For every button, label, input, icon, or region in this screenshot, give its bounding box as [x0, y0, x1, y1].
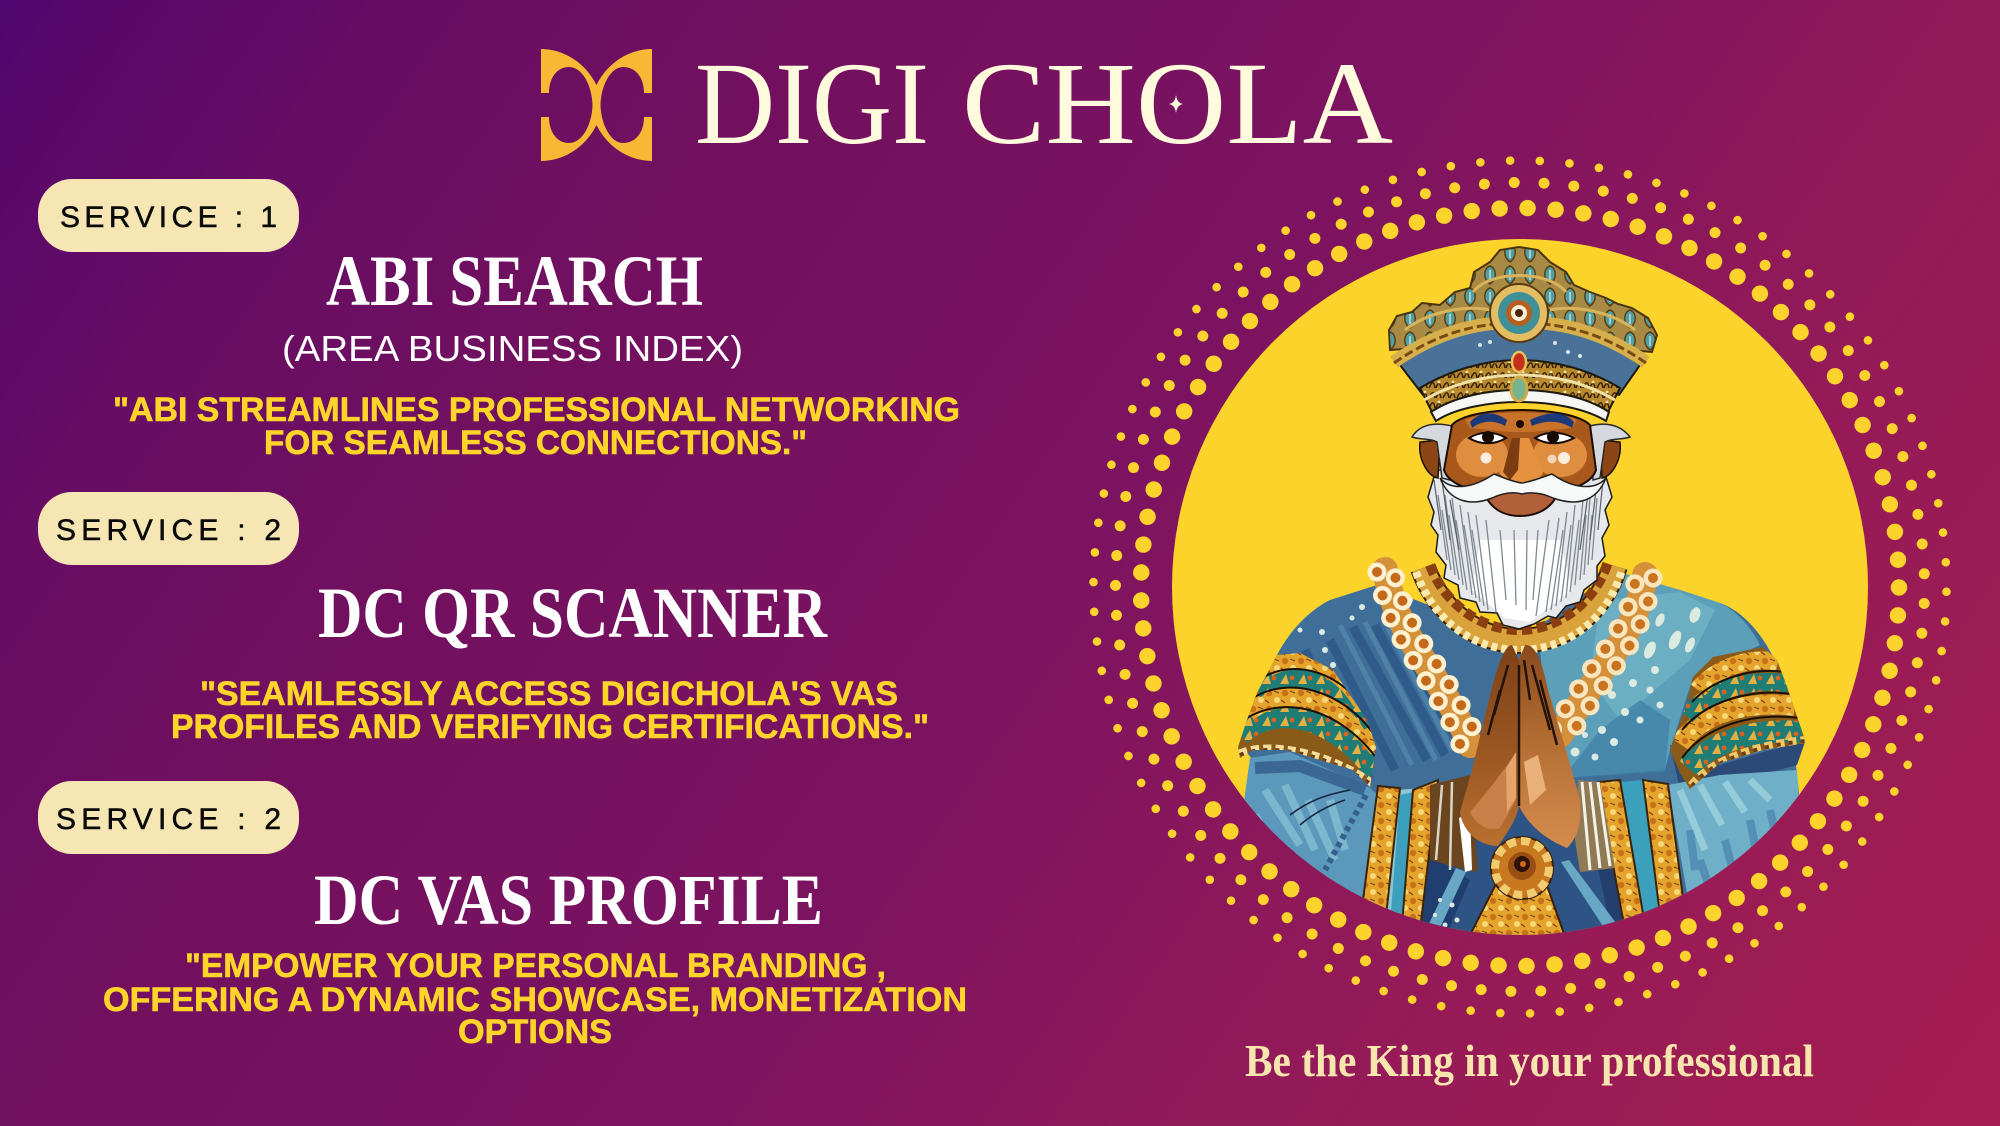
heading: DC VAS Profile: DC VAS PROFILE: [314, 860, 823, 940]
badge: service 1: [38, 179, 299, 252]
crown fan silhouette: [1389, 247, 1657, 352]
quote: VAS profile: "EMPOWER YOUR PERSONAL BRANDING ,: [185, 947, 886, 985]
garland right: [1552, 572, 1653, 740]
robe dark underarm and lower centre: [1670, 743, 1805, 783]
logo: Digi Chola: [541, 38, 1393, 169]
collar necklace: [1416, 562, 1622, 650]
badge: service 3: SERVICE : 2: [56, 803, 281, 836]
left armband: [1238, 653, 1376, 787]
brand wordmark: DIGI: [695, 38, 929, 169]
right hand: [1488, 645, 1580, 848]
brand wordmark: [695, 38, 1393, 169]
quote: ABI: FOR SEAMLESS CONNECTIONS.": [264, 424, 807, 462]
right cuff bands: [1598, 780, 1684, 925]
quote: ABI: "ABI STREAMLINES PROFESSIONAL NETWORKING: [113, 391, 960, 429]
left hand: [1460, 645, 1519, 846]
quote: scanner: PROFILES AND VERIFYING CERTIFICATIONS.": [171, 708, 929, 746]
illustration: king in namaste pose: [1230, 247, 1810, 960]
quote: ABI: [113, 391, 960, 462]
left forearm sleeve: [1244, 752, 1376, 898]
crown jewels: [1511, 352, 1527, 401]
robe dots: [1298, 597, 1702, 928]
icon: gold interlocking C mark: [541, 49, 652, 161]
right forearm sleeve: [1669, 770, 1799, 892]
crown white strip: [1431, 390, 1609, 421]
badge: service 3: [38, 781, 299, 854]
right armband: [1670, 647, 1806, 789]
dotted ring around portrait: [1089, 156, 1951, 1018]
quote: VAS profile: [103, 947, 967, 1051]
crown ornate band: [1420, 360, 1620, 412]
crown fan highlights: [1405, 276, 1635, 330]
crown medallion: [1490, 284, 1548, 342]
robe right panel: [1540, 570, 1760, 778]
left bangles: [1430, 775, 1478, 872]
mouth: [1486, 492, 1556, 516]
panel: service 1: [38, 179, 960, 462]
tagline: Be the King in your professional: [1245, 1035, 1814, 1086]
quote: VAS profile: OPTIONS: [458, 1013, 612, 1051]
subheading: area business index: (AREA BUSINESS INDEX): [282, 328, 743, 369]
ears and hair: [1412, 424, 1630, 480]
quote: scanner: [171, 675, 929, 746]
quote: VAS profile: OFFERING A DYNAMIC SHOWCASE, MONETIZATION: [103, 981, 967, 1019]
badge: service 2: [38, 492, 299, 565]
heading: DC QR Scanner: DC QR SCANNER: [318, 573, 828, 653]
robe left stripes: [1305, 622, 1460, 780]
crown: [1389, 247, 1657, 421]
pendant: [1470, 836, 1564, 935]
robe body: [1248, 586, 1799, 935]
crown gold rim: [1394, 322, 1646, 362]
face: [1444, 410, 1596, 494]
beard: [1428, 470, 1612, 629]
brand wordmark: CHOLA: [962, 38, 1393, 169]
quote: scanner: "SEAMLESSLY ACCESS DIGICHOLA'S VAS: [200, 675, 898, 713]
heading: ABI Search: ABI SEARCH: [326, 241, 703, 321]
badge: service 1: SERVICE : 1: [60, 201, 277, 234]
crown dots: [1478, 340, 1582, 358]
badge: service 2: SERVICE : 2: [56, 514, 281, 547]
moustache: [1440, 474, 1606, 502]
crown blue cap: [1400, 325, 1640, 395]
panel: service 2: [38, 492, 929, 746]
yellow portrait disc: [1172, 239, 1868, 935]
panel: service 3: [38, 781, 967, 1051]
garland left: [1377, 566, 1478, 749]
left cuff bands: [1361, 780, 1438, 930]
right bangles: [1575, 780, 1615, 872]
